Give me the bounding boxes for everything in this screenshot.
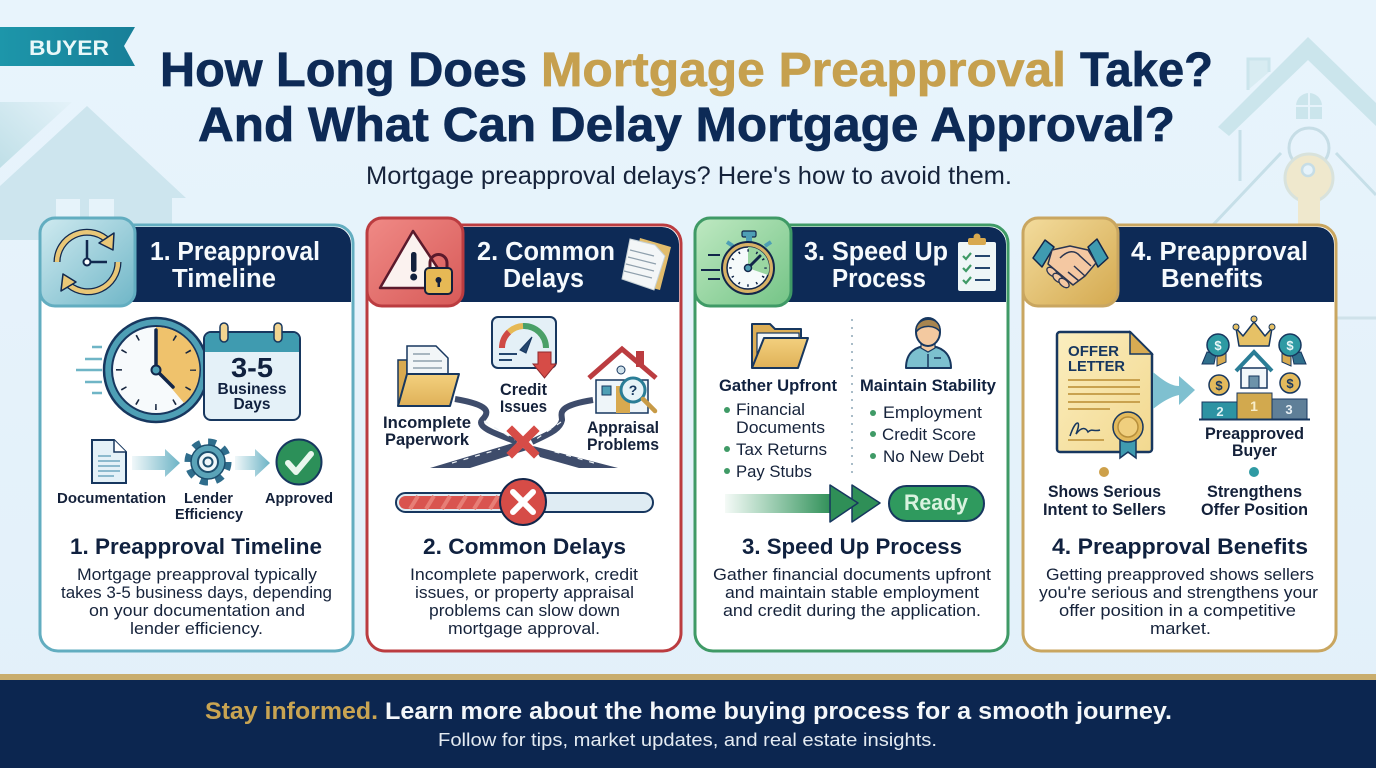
icon: calendar 3-5 business days: Days	[234, 396, 271, 413]
header heading: 1. Preapproval	[150, 238, 320, 266]
panel body text	[410, 565, 638, 638]
divider	[851, 319, 853, 473]
list: maintain stability: Credit Score	[882, 425, 976, 444]
icon: approved check	[276, 440, 322, 484]
ready pill: Ready	[904, 490, 969, 515]
panel body text: offer position in a competitive	[1059, 601, 1296, 620]
benefit labels: Shows Serious	[1048, 483, 1161, 501]
header heading: Benefits	[1161, 265, 1263, 293]
list: gather upfront: Documents	[736, 418, 825, 437]
icon: person	[906, 318, 951, 368]
roads and red cross	[430, 399, 618, 468]
list: maintain stability	[870, 403, 984, 466]
label: credit issues: Issues	[500, 398, 547, 416]
step labels: Approved	[265, 490, 333, 507]
header heading: Timeline	[172, 265, 276, 293]
panel heading: 3. Speed Up Process	[742, 534, 962, 559]
label: appraisal problems: Appraisal	[587, 419, 659, 437]
arrow: letter to buyer	[1153, 372, 1195, 409]
icon: folder upfront	[752, 324, 808, 368]
label: incomplete paperwork: Incomplete	[383, 414, 471, 432]
background house right with key	[1212, 37, 1376, 318]
panel body text: on your documentation and	[89, 601, 305, 620]
header heading	[150, 238, 320, 293]
header heading: 2. Common	[477, 238, 615, 266]
label: preapproved buyer	[1205, 425, 1304, 460]
panel heading: 1. Preapproval Timeline	[70, 534, 322, 559]
icon: appraisal house	[589, 349, 656, 413]
step labels: Documentation	[57, 490, 166, 507]
icon: gear	[188, 442, 228, 482]
icon: incomplete folder	[398, 346, 459, 406]
title	[160, 44, 1213, 152]
list: maintain stability: Employment	[883, 403, 982, 422]
header heading: 4. Preapproval	[1131, 238, 1308, 266]
panel body text: mortgage approval.	[448, 619, 600, 638]
icon: preapproved buyer podium: $	[1286, 338, 1294, 353]
ribbon badge: BUYER	[0, 27, 135, 66]
list: gather upfront: Tax Returns	[736, 440, 827, 459]
icon: appraisal house: ?	[629, 382, 637, 398]
background house left	[0, 102, 186, 240]
icon: preapproved buyer podium	[1199, 316, 1310, 420]
footer headline: Stay informed.	[205, 698, 378, 725]
icon: offer letter: LETTER	[1068, 358, 1125, 375]
subtitle: Mortgage preapproval delays? Here's how to avoid them.	[366, 162, 1012, 190]
panel body text: Getting preapproved shows sellers	[1046, 565, 1314, 584]
benefit dots	[1099, 467, 1259, 477]
icon: offer letter: OFFER	[1068, 343, 1119, 360]
icon: calendar 3-5 business days: 3-5	[231, 352, 273, 383]
label: appraisal problems: Problems	[587, 436, 659, 454]
footer headline: Learn more about the home buying process for a smooth journey.	[385, 698, 1172, 725]
panel heading: 4. Preapproval Benefits	[1052, 534, 1308, 559]
header heading: 3. Speed Up	[804, 238, 948, 266]
label: incomplete paperwork: Paperwork	[385, 431, 470, 449]
benefit labels	[1043, 483, 1308, 519]
panel body text: and credit during the application.	[723, 601, 981, 620]
benefit labels: Offer Position	[1201, 501, 1308, 519]
column headings	[719, 377, 997, 395]
panel: 3. Speed Up Process	[695, 218, 1008, 651]
title: How Long Does	[160, 44, 527, 97]
icon: calendar 3-5 business days: Business	[218, 381, 287, 398]
column headings: Gather Upfront	[719, 377, 837, 395]
icon: preapproved buyer podium: $	[1214, 338, 1222, 353]
arrow: to ready	[725, 485, 880, 522]
icon: paperwork stack	[622, 238, 671, 290]
panel body text: you're serious and strengthens your	[1039, 583, 1318, 602]
header heading	[804, 238, 948, 293]
icon: preapproved buyer podium: $	[1215, 378, 1223, 393]
panel body text: problems can slow down	[429, 601, 620, 620]
header heading: Delays	[503, 265, 584, 293]
header heading: Process	[832, 265, 926, 293]
arrow: documentation to lender	[132, 449, 180, 477]
panel body text	[1039, 565, 1318, 638]
ribbon badge: BUYER: BUYER	[29, 37, 109, 60]
ready pill	[889, 486, 984, 521]
progress bar blocked	[396, 479, 653, 525]
footer subtext: Follow for tips, market updates, and real estate insights.	[438, 730, 937, 750]
panel body text	[61, 565, 332, 638]
step labels	[57, 490, 333, 523]
icon: preapproved buyer podium: 2	[1216, 404, 1224, 419]
icon: stopwatch tile	[695, 218, 791, 306]
icon: preapproved buyer podium: $	[1286, 376, 1294, 391]
icon: checklist clipboard	[958, 234, 996, 291]
arrow: lender to approved	[235, 449, 270, 477]
icon: handshake tile	[1023, 218, 1118, 306]
title: Take?	[1080, 44, 1213, 97]
panel body text: market.	[1150, 619, 1211, 638]
label: appraisal problems	[587, 419, 659, 454]
icon: preapproved buyer podium: 1	[1250, 398, 1258, 414]
benefit labels: Strengthens	[1207, 483, 1302, 501]
panel: 1. Preapproval Timeline	[40, 218, 353, 651]
list: gather upfront: Financial	[736, 400, 805, 419]
step labels: Efficiency	[175, 506, 244, 523]
label: preapproved buyer: Preapproved	[1205, 425, 1304, 443]
panel body text	[713, 565, 991, 620]
panel heading: 2. Common Delays	[423, 534, 626, 559]
icon: credit gauge	[492, 317, 556, 378]
panel body text: lender efficiency.	[130, 619, 263, 638]
panel body text: Gather financial documents upfront	[713, 565, 991, 584]
panel: 4. Preapproval Benefits	[1023, 218, 1336, 651]
list: gather upfront	[724, 400, 827, 481]
benefit labels: Intent to Sellers	[1043, 501, 1166, 519]
panel: 2. Common Delays	[367, 218, 681, 651]
icon: warning and lock tile	[367, 218, 463, 306]
icon: offer letter	[1057, 332, 1152, 458]
label: incomplete paperwork	[383, 414, 471, 449]
panel body text: takes 3-5 business days, depending	[61, 583, 332, 602]
header heading	[1131, 238, 1308, 293]
header heading	[477, 238, 615, 293]
icon: calendar 3-5 business days	[204, 323, 300, 420]
icon: clock	[76, 318, 208, 422]
icon: clock cycle tile	[40, 218, 135, 306]
list: gather upfront: Pay Stubs	[736, 462, 812, 481]
step labels: Lender	[184, 490, 233, 507]
label: credit issues: Credit	[500, 381, 547, 399]
icon: preapproved buyer podium: 3	[1285, 402, 1293, 417]
panel body text: Mortgage preapproval typically	[77, 565, 318, 584]
panel body text: and maintain stable employment	[725, 583, 979, 602]
list: maintain stability: No New Debt	[883, 447, 984, 466]
panel body text: issues, or property appraisal	[415, 583, 634, 602]
label: credit issues	[500, 381, 547, 416]
footer banner	[0, 674, 1376, 768]
icon: document	[92, 440, 126, 483]
panel body text: Incomplete paperwork, credit	[410, 565, 638, 584]
title: Mortgage Preapproval	[541, 44, 1066, 97]
label: preapproved buyer: Buyer	[1232, 442, 1278, 460]
title: And What Can Delay Mortgage Approval?	[198, 99, 1175, 152]
column headings: Maintain Stability	[860, 377, 997, 395]
